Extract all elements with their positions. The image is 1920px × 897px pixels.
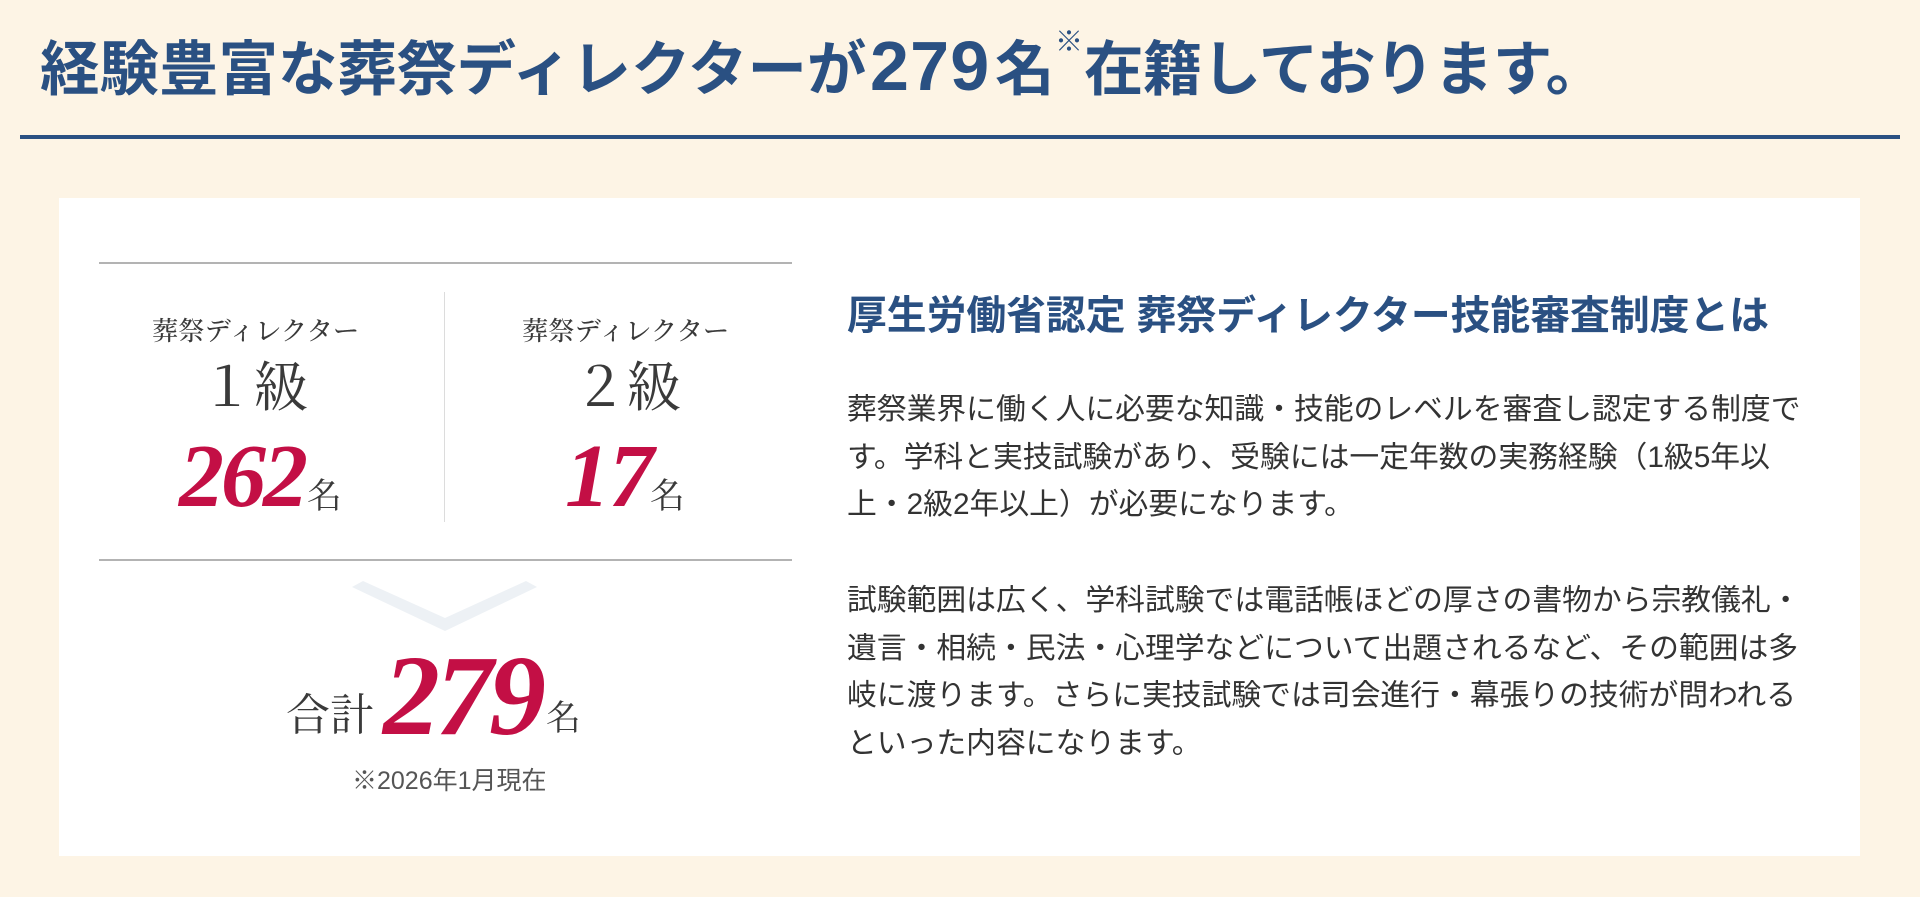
total unit: 名	[546, 699, 581, 738]
description paragraph 2: といった内容になります。	[847, 726, 1202, 760]
description paragraph 1	[847, 393, 1800, 521]
grade 2 unit: 名	[650, 477, 685, 516]
title divider	[20, 135, 1900, 139]
column divider	[444, 292, 445, 522]
grade 1 count: 262	[179, 427, 305, 526]
panel: white content card	[59, 198, 1860, 856]
title: ※	[1055, 26, 1083, 57]
description paragraph 2	[847, 584, 1800, 760]
icon: chevron arrow down	[352, 581, 536, 631]
grade 1 label: 葬祭ディレクター	[152, 317, 359, 346]
description heading: 厚生労働省認定 葬祭ディレクター技能審査制度とは	[847, 294, 1769, 338]
title: 279	[870, 27, 990, 105]
top rule	[99, 262, 792, 264]
description paragraph 1: 葬祭業界に働く人に必要な知識・技能のレベルを審査し認定する制度で	[847, 393, 1800, 426]
description paragraph 1: 上・2級2年以上）が必要になります。	[847, 488, 1354, 521]
title	[40, 26, 1605, 105]
date note: ※2026年1月現在	[352, 766, 547, 794]
grade 2 count: 17	[565, 427, 653, 526]
description paragraph 2: 岐に渡ります。さらに実技試験では司会進行・幕張りの技術が問われる	[847, 679, 1796, 712]
description paragraph 2: 遺言・相続・民法・心理学などについて出題されるなど、その範囲は多	[847, 632, 1798, 664]
grade 2 label: 葬祭ディレクター	[522, 317, 729, 346]
description paragraph 1: す。学科と実技試験があり、受験には一定年数の実務経験（1級5年以	[847, 440, 1770, 474]
description paragraph 2: 試験範囲は広く、学科試験では電話帳ほどの厚さの書物から宗教儀礼・	[847, 584, 1800, 617]
title: 在籍しております。	[1084, 36, 1605, 103]
grade 1 heading: １級	[200, 358, 308, 418]
total count: 279	[383, 632, 542, 759]
grade 2 heading: ２級	[573, 358, 681, 418]
title: 名	[995, 36, 1054, 103]
title: 経験豊富な葬祭ディレクターが	[40, 36, 866, 103]
bottom rule	[99, 559, 792, 561]
grade 1 unit: 名	[307, 477, 342, 516]
total label: 合計	[286, 691, 374, 740]
